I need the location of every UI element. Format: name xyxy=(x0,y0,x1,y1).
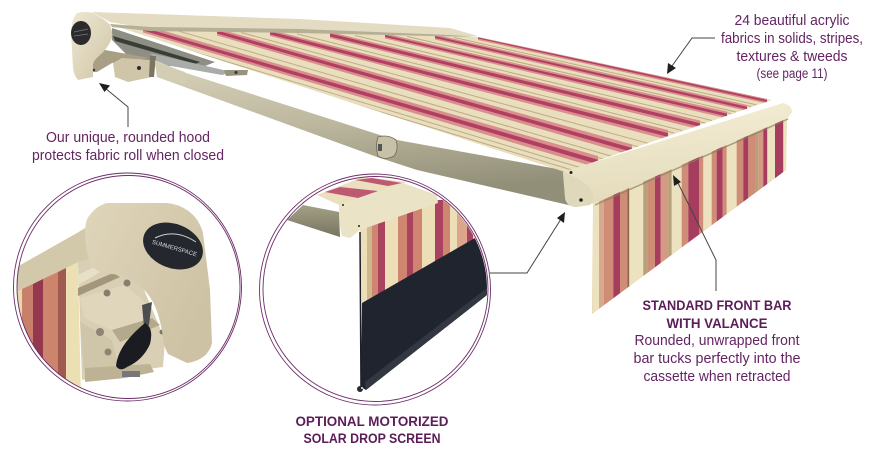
text: front bar note: bar tucks perfectly into the xyxy=(634,351,800,367)
dark solar screen xyxy=(357,232,490,392)
text: solar screen heading: OPTIONAL MOTORIZED xyxy=(296,414,449,429)
text: front bar note: Rounded, unwrapped front xyxy=(634,333,800,349)
text: fabrics note: 24 beautiful acrylic xyxy=(734,13,850,29)
hood casting xyxy=(85,203,212,363)
arrow: fabrics xyxy=(667,38,715,74)
text: front bar note xyxy=(634,298,800,385)
underside mechanism xyxy=(93,28,248,82)
fabric stripes xyxy=(16,262,81,388)
text: fabrics note: fabrics in solids, stripes, xyxy=(721,31,863,47)
arm stub xyxy=(287,205,340,237)
SummerSpace emblem: SUMMERSPACE xyxy=(151,240,197,258)
inset circle: solar drop screen xyxy=(260,174,495,405)
hood xyxy=(71,12,112,80)
text: fabrics note: (see page 11) xyxy=(756,66,828,81)
text: front bar note: WITH VALANCE xyxy=(666,316,768,331)
text: fabrics note xyxy=(721,13,863,81)
black handle xyxy=(116,302,152,377)
striped valance xyxy=(592,118,788,314)
inset circle: rounded hood detail xyxy=(14,173,242,401)
arrow: front bar xyxy=(673,175,716,291)
text: solar screen heading: SOLAR DROP SCREEN xyxy=(304,431,440,446)
front bar section xyxy=(339,183,438,238)
text: solar screen heading xyxy=(296,414,449,446)
arrow: solar screen connector xyxy=(490,212,565,273)
support arm xyxy=(155,60,577,207)
front bar xyxy=(563,103,792,207)
text: front bar note: STANDARD FRONT BAR xyxy=(642,298,792,313)
text: hood note xyxy=(32,130,224,164)
awning main illustration xyxy=(71,12,792,320)
arrow: hood xyxy=(99,83,128,127)
valance stripes xyxy=(360,200,478,303)
striped canopy fabric xyxy=(101,26,772,172)
text: hood note: protects fabric roll when closed xyxy=(32,148,224,164)
text: front bar note: cassette when retracted xyxy=(644,369,790,385)
mechanism xyxy=(78,258,165,382)
canopy fabric stub xyxy=(317,177,407,205)
SummerSpace emblem xyxy=(143,222,203,270)
text: fabrics note: textures & tweeds xyxy=(736,49,848,65)
cassette xyxy=(92,12,478,37)
cassette side xyxy=(15,225,90,295)
text: hood note: Our unique, rounded hood xyxy=(46,130,210,146)
